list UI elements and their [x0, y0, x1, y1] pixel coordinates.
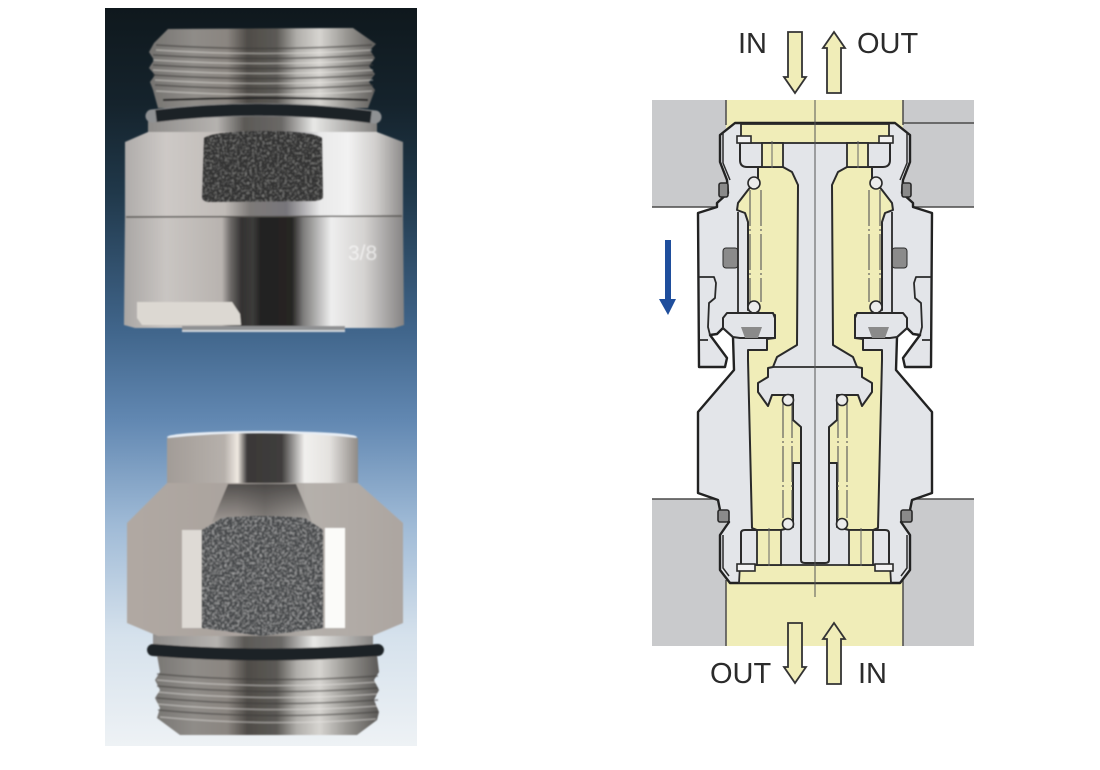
hex body: [127, 483, 403, 636]
label: OUT bottom: OUT: [710, 658, 772, 690]
fluid chamber right: [829, 167, 893, 530]
cap top: [167, 431, 357, 443]
lower lip: [182, 326, 345, 332]
lower thread: [155, 655, 379, 735]
label: IN bottom: IN: [858, 658, 887, 690]
panel: product photo: [105, 8, 417, 746]
arrow: blue movement direction: [659, 240, 676, 315]
upper body below seam: [124, 216, 404, 328]
centre line: [814, 100, 816, 597]
upper body above seam: [125, 132, 403, 217]
port block top left: [652, 100, 726, 207]
lower wrench flat: [202, 516, 323, 636]
seam: [126, 216, 402, 217]
cap: [167, 433, 358, 486]
lower coupling half: [127, 431, 403, 735]
arrow: OUT top: [823, 32, 845, 93]
coupling body: [698, 123, 932, 583]
port block bottom right: [903, 499, 974, 646]
upper wrench flat: [202, 131, 323, 202]
fluid channel top: [726, 100, 903, 130]
notch: [137, 302, 241, 325]
port block top right: [903, 100, 974, 207]
fluid manifold bottom: [739, 565, 891, 583]
lower collar: [153, 630, 373, 650]
upper thread: [149, 28, 376, 108]
arrow: OUT bottom: [784, 623, 806, 683]
fluid channel bottom: [726, 575, 903, 646]
port block edges: [652, 100, 974, 646]
hex highlights: [182, 530, 202, 628]
upper collar: [148, 114, 377, 134]
photo background: [105, 8, 417, 746]
panel: cross-section diagram: [652, 28, 974, 690]
lower o-ring: [153, 650, 378, 654]
upper o-ring: [152, 110, 375, 117]
arrow: IN top: [784, 32, 806, 93]
fluid chamber left: [737, 167, 801, 530]
upper coupling half: [124, 28, 404, 332]
poppet divider: [773, 366, 857, 368]
hex shading above flat: [212, 484, 312, 522]
engraved size mark: 3/8: [348, 242, 377, 265]
port block bottom left: [652, 499, 726, 646]
arrow: IN bottom: [823, 623, 845, 684]
fluid manifold top: [741, 124, 889, 143]
label: OUT top: OUT: [857, 28, 918, 60]
label: IN top: IN: [738, 28, 767, 60]
internal parts right: [815, 133, 931, 576]
internal parts left: [699, 133, 815, 576]
